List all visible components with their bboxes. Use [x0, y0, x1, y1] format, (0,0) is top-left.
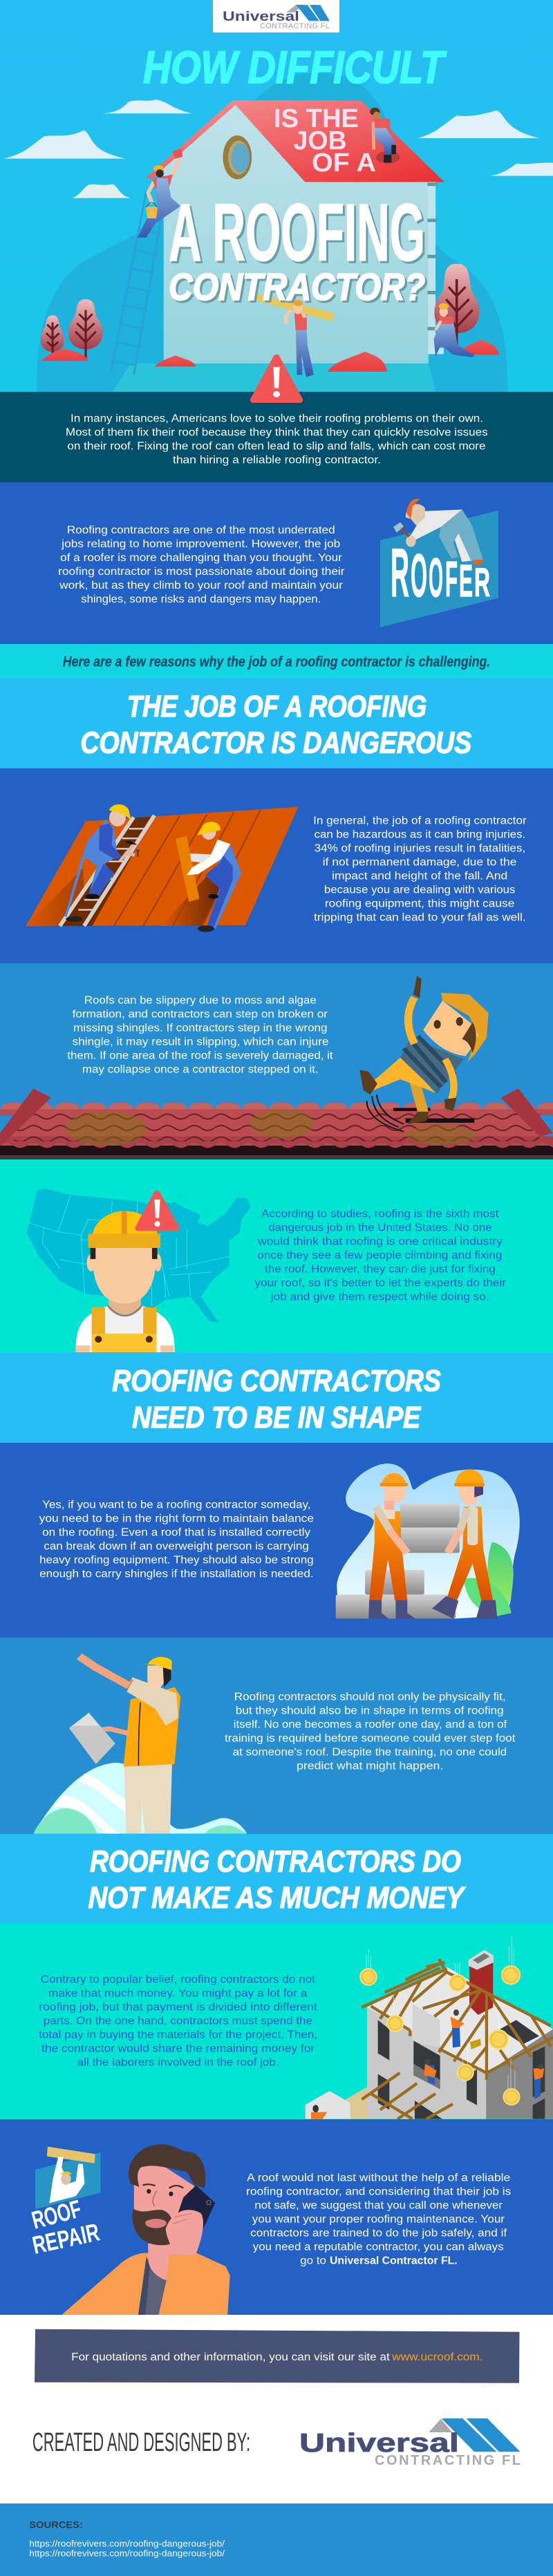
text block: missing shingles. If contractors step in the wrong: [73, 1023, 327, 1034]
text block: go to: [300, 2255, 326, 2267]
bushes: [41, 340, 499, 372]
heading: in shape: [0, 1352, 553, 1443]
illustration: tiled roof: [0, 1088, 553, 1159]
panel: hero: [0, 0, 553, 392]
text block: them. If one area of the roof is severely damaged, it: [67, 1050, 333, 1061]
roofer badge: E: [459, 555, 473, 606]
roofer badge: O: [411, 541, 427, 609]
icon: warning triangle: [253, 357, 300, 400]
call to action box: [35, 2329, 520, 2383]
heading: dangerous: THE JOB OF A ROOFING: [127, 690, 427, 723]
title: how difficult: HOW DIFFICULT: [143, 41, 447, 93]
text block: can break down if an overweight person is carrying: [44, 1541, 309, 1553]
created and designed by: CREATED AND DESIGNED BY:: [32, 2428, 250, 2457]
text block: [313, 815, 527, 923]
text block: make that much money. You might pay a lot for a: [48, 1988, 308, 2000]
text block: you need to be in the right form to maintain balance: [39, 1513, 314, 1525]
text block: roofing job, but that payment is divided into different: [39, 2002, 317, 2014]
heading: money: NOT MAKE AS MUCH MONEY: [88, 1881, 466, 1915]
text block: shingle, it may result in slipping, which can injure: [73, 1036, 328, 1048]
logo: footer: [299, 2418, 521, 2468]
heading: money: ROOFING CONTRACTORS DO: [90, 1845, 461, 1879]
worker carrying plank: [256, 294, 335, 377]
roof repair badge: REPAIR: [30, 2217, 102, 2260]
text block: work, but as they climb to your roof and maintain your: [59, 580, 343, 591]
roofer badge: R: [391, 534, 409, 611]
text block: the contractor would share the remaining money for: [41, 2043, 315, 2055]
panel: money: [0, 1924, 553, 2119]
text block: enough to carry shingles if the installation is needed.: [39, 1569, 314, 1580]
intro text: [66, 413, 488, 466]
text block: Roofing contractors should not only be physically fit,: [234, 1691, 506, 1703]
panel: roofers underrated: [0, 482, 553, 644]
title: contractor: CONTRACTOR?: [171, 267, 427, 310]
heading: money: [0, 1834, 553, 1924]
tree: small left: [41, 315, 64, 353]
title: is the job of a: JOB: [293, 126, 347, 155]
text block: not safe, we suggest that you call one whenever: [254, 2200, 503, 2212]
logo: top: [213, 0, 339, 32]
text block: because you are dealing with various: [324, 884, 516, 896]
worker at drainpipe: [434, 303, 474, 357]
text block: [254, 1208, 506, 1303]
text block: predict what might happen.: [297, 1760, 443, 1772]
text block: the roof. However, they can die just for fixing: [265, 1263, 496, 1275]
text block: at someone's roof. Despite the training, no one could: [233, 1746, 507, 1758]
text block: once they see a few people climbing and fixing: [257, 1249, 502, 1261]
heading: dangerous: [0, 679, 553, 768]
call to action box: For quotations and other information, you can visit our site at: [71, 2351, 391, 2363]
illustration: US map: [26, 1188, 250, 1323]
text block: you want your proper roofing maintenance. Your: [252, 2214, 505, 2226]
panel: right form: [0, 1443, 553, 1638]
illustration: house under construction with coins: [306, 1937, 553, 2119]
panel: hazardous: [0, 768, 553, 963]
text block: impact and height of the fall. And: [332, 870, 507, 882]
text block: [225, 1691, 516, 1772]
text block: you need a reputable contractor, you can always: [253, 2242, 504, 2253]
roofer badge: O: [429, 547, 443, 608]
text block: Roofs can be slippery due to moss and algae: [84, 995, 317, 1006]
illustration: slipping worker: [359, 976, 489, 1132]
text block: heavy roofing equipment. They should also be strong: [39, 1555, 314, 1566]
band: reasons: [0, 644, 553, 679]
intro text: on their roof. Fixing the roof can often lead to slip and falls, which can cost more: [67, 440, 485, 452]
text block: [58, 524, 344, 605]
roof repair badge: ROOF: [28, 2194, 84, 2235]
panel: intro dark: [0, 357, 553, 482]
text block: roofing equipment, this might cause: [325, 898, 514, 909]
title: is the job of a: IS THE: [274, 104, 359, 133]
text block: [39, 1499, 314, 1580]
text block: [246, 2172, 512, 2267]
text block: shingles, some risks and dangers may happen.: [81, 594, 321, 605]
text block: [67, 995, 333, 1075]
title: contractor: CONTRACTOR?: [169, 265, 425, 308]
illustration: workers on roof: [26, 804, 299, 932]
text block: 34% of roofing injuries result in fatalities,: [315, 842, 525, 854]
panel: shape in terms of roofing: [0, 1638, 553, 1834]
sources links: https://roofrevivers.com/roofing-dangerous-job/: [29, 2548, 225, 2559]
text block: roofing contractor is most passionate about doing their: [58, 566, 344, 578]
text block: jobs relating to home improvement. However, the job: [61, 538, 340, 550]
text block: all the laborers involved in the roof job.: [77, 2057, 279, 2069]
title: a roofing: [169, 187, 427, 281]
text block: parts. On the one hand, contractors must spend the: [44, 2016, 312, 2027]
roofer badge: R: [474, 560, 490, 605]
text block: A roof would not last without the help of a reliable: [247, 2172, 510, 2184]
panel: sources: [0, 2503, 553, 2576]
text block: can be hazardous as it can bring injuries.: [315, 828, 525, 840]
heading: in shape: NEED TO BE IN SHAPE: [132, 1401, 422, 1434]
text block: job and give them respect while doing so.: [270, 1291, 489, 1303]
intro text: Most of them fix their roof because they think that they can quickly resolve issues: [66, 426, 488, 438]
text block: but they should also be in shape in terms of roofing: [236, 1705, 504, 1716]
illustration: two workers carrying stones: [336, 1464, 520, 1618]
worker on ladder: [138, 149, 182, 238]
text block: roofing contractor, and considering that their job is: [246, 2186, 512, 2198]
text block: Contrary to popular belief, roofing contractors do not: [41, 1974, 316, 1986]
text block: tripping that can lead to your fall as well.: [314, 911, 526, 923]
text block: Yes, if you want to be a roofing contractor someday,: [42, 1499, 310, 1511]
logo: top: Universal: [223, 10, 299, 24]
text block: on the roofing. Even a roof that is installed correctly: [42, 1527, 310, 1539]
panel: sixth most dangerous: [0, 1159, 553, 1352]
heading: in shape: ROOFING CONTRACTORS: [112, 1364, 441, 1398]
tree: tall left: [68, 299, 103, 359]
text block: may collapse once a contractor stepped on it.: [82, 1064, 319, 1075]
text block: if not permanent damage, due to the: [323, 856, 516, 868]
logo: footer: Universal: [299, 2429, 459, 2458]
sources heading: SOURCES:: [29, 2519, 83, 2530]
worker on roof: [370, 108, 400, 164]
ladder: [111, 191, 166, 375]
sources links: https://roofrevivers.com/roofing-dangerous-job/: [29, 2539, 225, 2549]
text block: Universal Contractor FL.: [330, 2255, 458, 2267]
panel: slippery: [0, 963, 553, 1159]
panel: final advice: [0, 2119, 553, 2315]
call to action box: www.ucroof.com.: [391, 2351, 482, 2363]
text block: [39, 1974, 317, 2069]
text block: would think that roofing is one critical industry: [257, 1235, 503, 1247]
intro text: than hiring a reliable roofing contractor.: [173, 455, 381, 466]
heading: dangerous: CONTRACTOR IS DANGEROUS: [80, 726, 471, 760]
panel: footer white: [0, 2315, 553, 2503]
roofer badge: [380, 499, 498, 627]
logo: top: CONTRACTING FL: [260, 22, 330, 30]
sources links: [29, 2539, 225, 2559]
hero illustration: house with roofers: [3, 73, 553, 392]
tree: right: [434, 264, 479, 347]
illustration: worker with warning: [76, 1193, 176, 1352]
intro text: In many instances, Americans love to solve their roofing problems on their own.: [71, 413, 483, 424]
text block: contractors are trained to do the job safely, and if: [250, 2228, 507, 2239]
roofer badge: F: [445, 552, 458, 607]
roof repair badge: [28, 2147, 102, 2260]
text block: itself. No one becomes a roofer one day, and a ton of: [234, 1718, 507, 1730]
text block: formation, and contractors can step on broken or: [73, 1009, 328, 1020]
illustration: man on phone: [62, 2144, 230, 2315]
text block: your roof, so it's better to let the experts do their: [254, 1277, 506, 1289]
logo: footer: CONTRACTING FL: [375, 2453, 521, 2468]
title: is the job of a: OF A: [312, 149, 376, 178]
text block: of a roofer is more challenging than you thought. Your: [60, 552, 342, 564]
title: is the job of a: [274, 104, 376, 178]
text block: In general, the job of a roofing contractor: [313, 815, 527, 826]
text block: training is required before someone could ever step foot: [225, 1732, 516, 1744]
text block: Roofing contractors are one of the most underrated: [67, 524, 335, 536]
illustration: pointing worker on hill: [33, 1656, 247, 1834]
text block: total pay in buying the materials for the project. Then,: [39, 2029, 317, 2041]
text block: dangerous job in the United States. No one: [268, 1222, 492, 1233]
text block: According to studies, roofing is the sixth most: [261, 1208, 499, 1220]
